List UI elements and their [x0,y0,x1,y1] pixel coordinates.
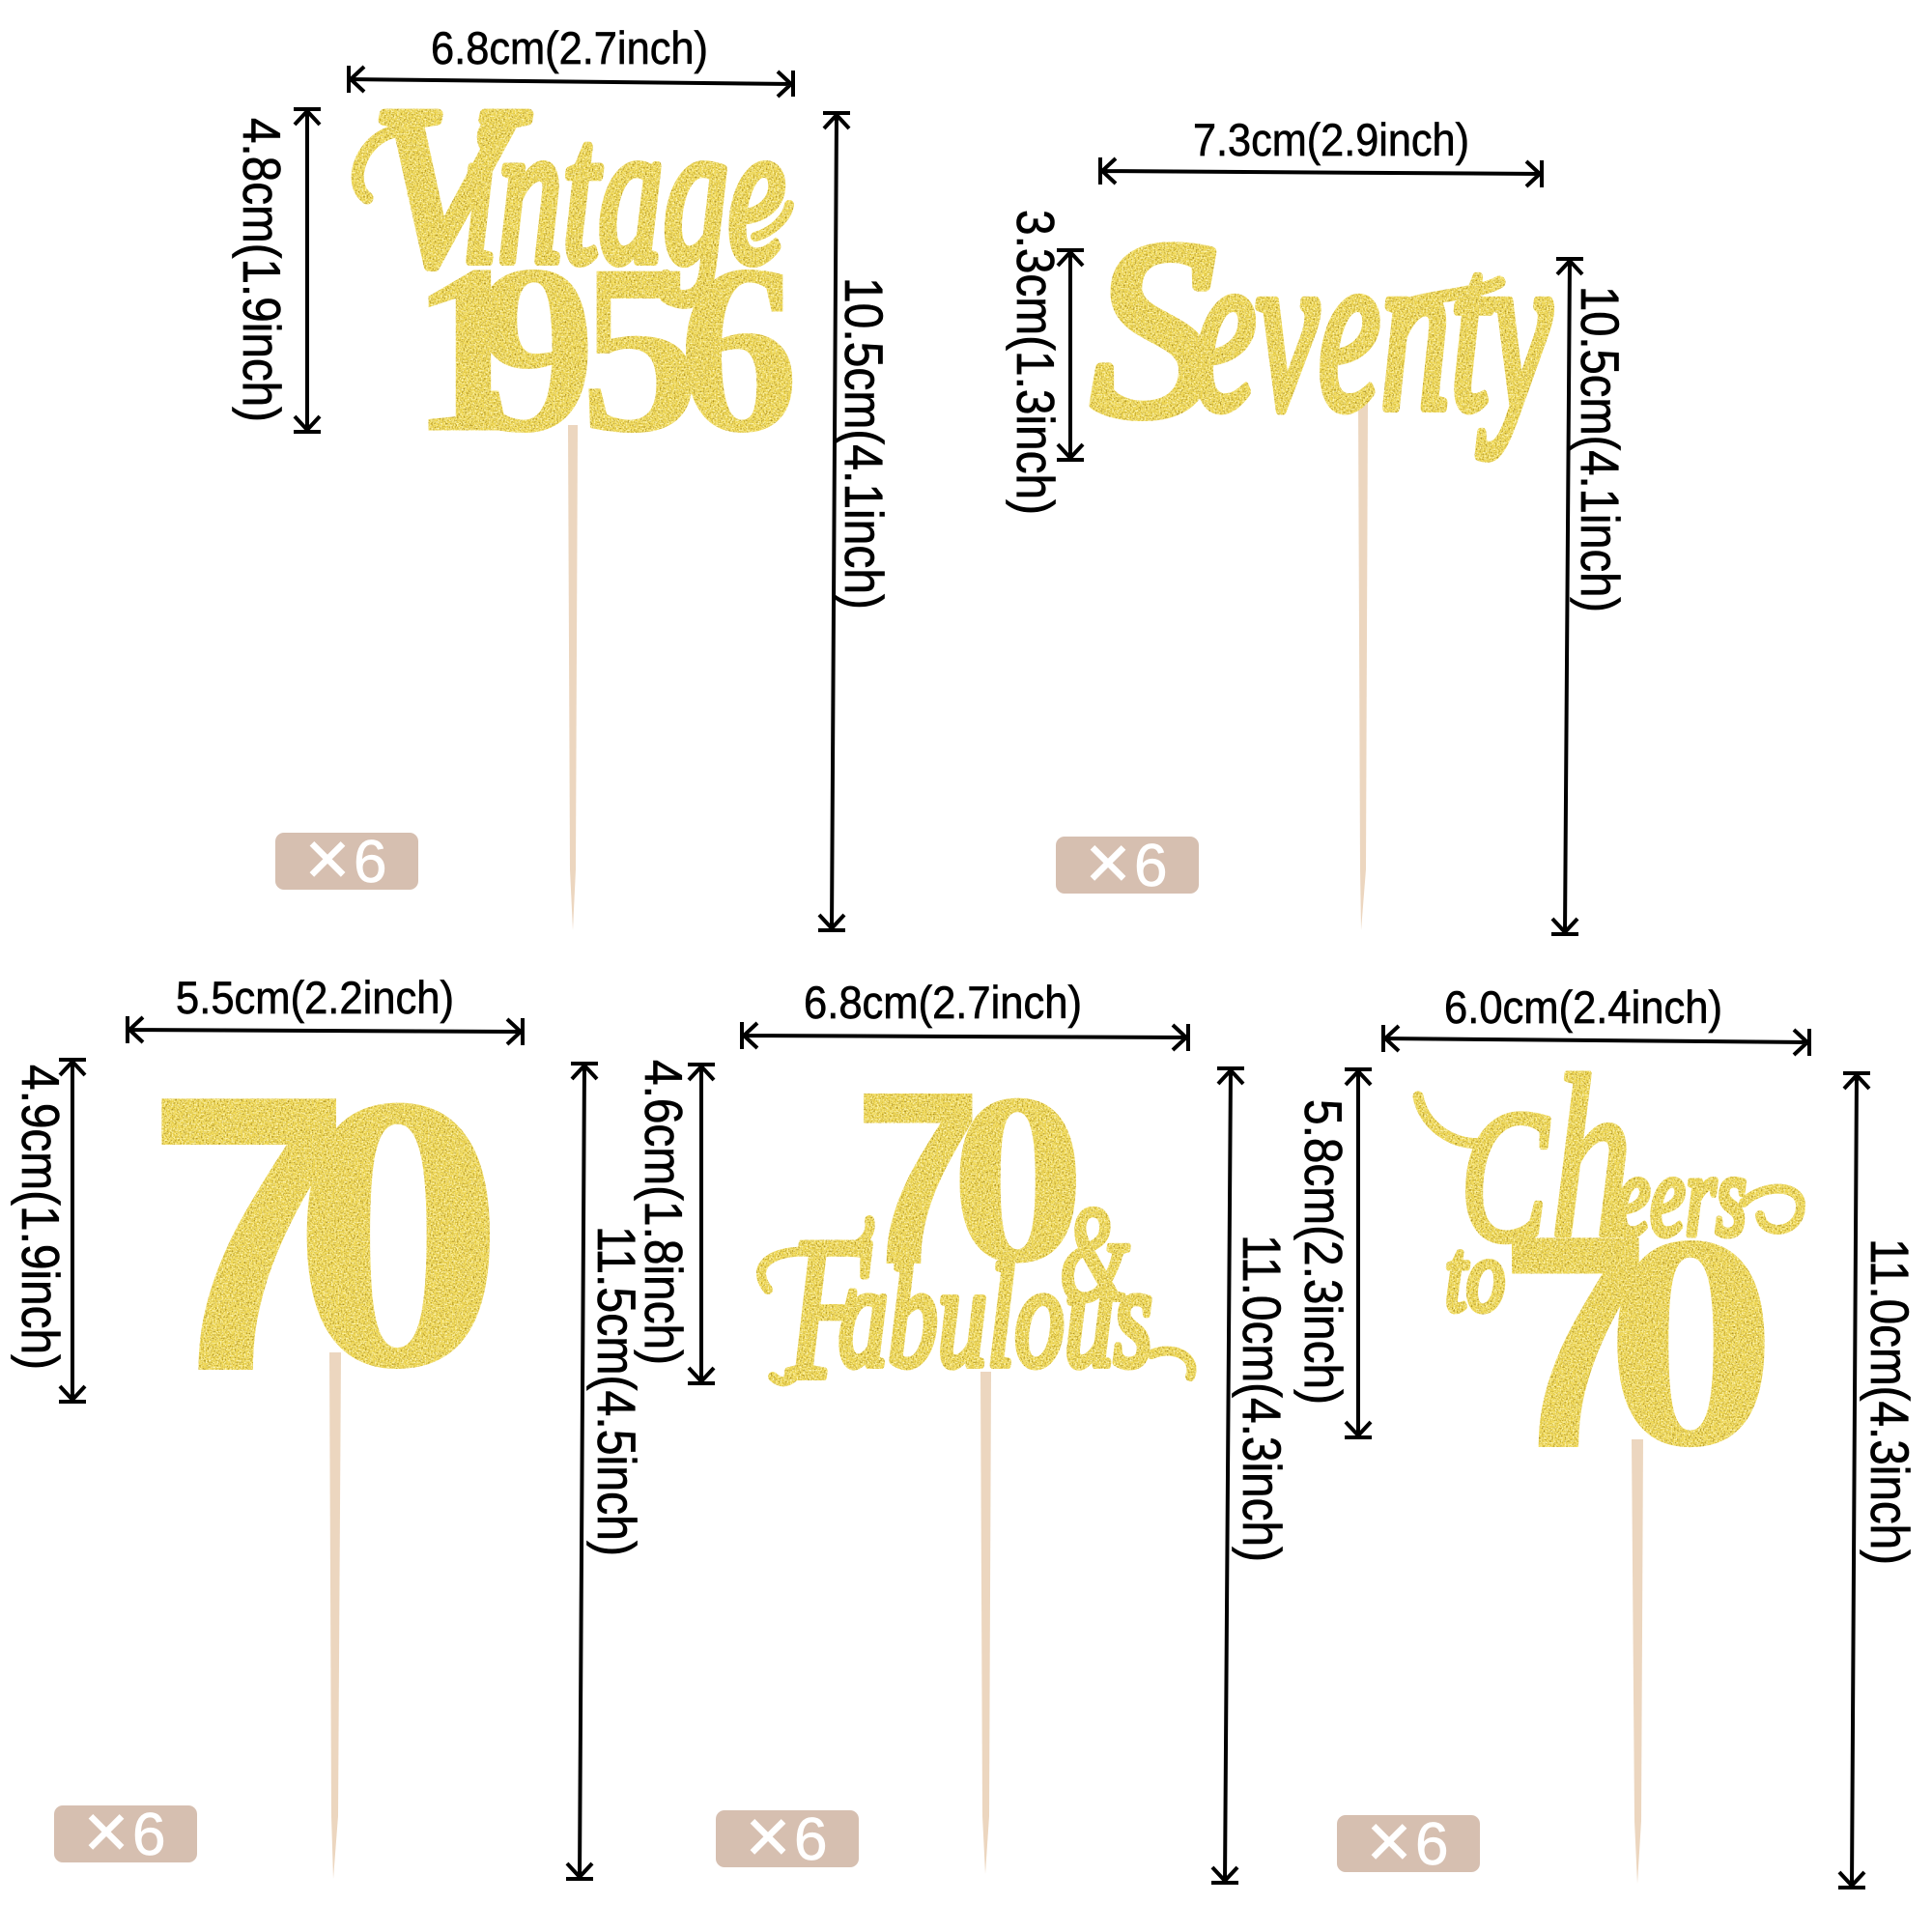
quantity badge: x6 [1056,819,1199,905]
total height label: 10.5cm: 10.5cm(4.1inch) [1570,286,1630,612]
topper: 70 glitter numerals: 0 [292,1016,505,1449]
topper: 70 and Fabulous glitter lettering: & [1060,1179,1129,1329]
quantity badge: x6 [275,815,418,901]
quantity badge: x6: 6 [132,1802,165,1868]
panel: Seventy topper [1006,114,1630,934]
quantity badge: x6 [716,1793,859,1879]
quantity badge: x6: 6 [354,829,386,895]
topper: Vintage 1956 glitter lettering: 1956 [410,215,799,483]
stick: Cheers to 70 [1632,1439,1643,1884]
total height arrow: 11.0cm [1838,1073,1870,1888]
total height label: 10.5cm: 10.5cm(4.1inch) [834,277,894,610]
topper: 70 and Fabulous glitter lettering: abulous [838,1236,1152,1397]
topper: Vintage 1956 glitter lettering: V [372,61,529,312]
total height arrow: 10.5cm [818,113,850,930]
topper: Cheers to 70 glitter lettering: 7 [1501,1175,1650,1511]
topper: Cheers to 70 glitter lettering: eers [1615,1131,1747,1260]
topper: 70 glitter numerals: 7 [147,1015,352,1453]
total height arrow: 11.0cm [1211,1068,1244,1883]
panel: 70 and Fabulous topper [634,977,1292,1883]
topper: Vintage 1956 glitter lettering: intage [462,81,785,305]
quantity badge: x6: 6 [794,1806,827,1873]
width dimension arrow: 6.8cm [349,66,793,97]
stick: Vintage 1956 [568,425,578,930]
height dimension arrow: 4.9cm [59,1060,86,1402]
topper: Cheers to 70 glitter lettering: to [1445,1219,1505,1332]
quantity badge: x6: × [84,1788,128,1874]
panel: Vintage 1956 topper [232,22,894,930]
height label: 3.3cm: 3.3cm(1.3inch) [1006,210,1065,515]
topper: Seventy glitter lettering [1092,190,1551,469]
height label: 4.6cm: 4.6cm(1.8inch) [634,1060,693,1365]
topper: Cheers to 70 glitter lettering [1418,1028,1801,1511]
topper: 70 and Fabulous glitter lettering: 0 [951,1045,1085,1313]
total height arrow: 11.5cm [566,1064,598,1879]
height dimension arrow: 4.8cm [294,109,321,432]
stick: 70 and Fabulous [980,1372,991,1874]
height label: 4.9cm: 4.9cm(1.9inch) [11,1065,70,1370]
topper: 70 and Fabulous glitter lettering [761,1041,1192,1421]
topper: Cheers to 70 glitter lettering: 0 [1605,1174,1776,1510]
topper: 70 and Fabulous glitter lettering: F [786,1197,871,1421]
height dimension arrow: 5.8cm [1345,1069,1372,1437]
height label: 5.8cm: 5.8cm(2.3inch) [1293,1099,1352,1405]
width dimension arrow: 7.3cm [1100,157,1542,187]
total height arrow: 10.5cm [1551,259,1583,934]
quantity badge: x6: 6 [1415,1811,1448,1878]
width label: 6.8cm: 6.8cm(2.7inch) [431,22,708,73]
width label: 7.3cm: 7.3cm(2.9inch) [1193,114,1469,165]
width label: 6.8cm: 6.8cm(2.7inch) [804,977,1082,1028]
total height label: 11.5cm: 11.5cm(4.5inch) [586,1226,646,1556]
quantity badge: x6: 6 [1134,833,1167,899]
width dimension arrow: 6.0cm [1383,1025,1809,1056]
stick: 70 [329,1352,341,1879]
quantity badge: x6 [1337,1798,1480,1884]
topper: Seventy glitter lettering: S [1092,190,1215,469]
total height label: 11.0cm: 11.0cm(4.3inch) [1860,1238,1919,1565]
stick: Seventy [1358,401,1368,930]
width label: 5.5cm: 5.5cm(2.2inch) [176,972,454,1023]
height dimension arrow: 3.3cm [1057,250,1084,460]
width label: 6.0cm: 6.0cm(2.4inch) [1444,981,1722,1033]
height label: 4.8cm: 4.8cm(1.9inch) [232,118,291,422]
quantity badge: x6: × [305,815,350,901]
quantity badge: x6: × [1086,819,1130,905]
quantity badge: x6 [54,1788,197,1874]
panel: 70 topper [11,972,646,1879]
total height label: 11.0cm: 11.0cm(4.3inch) [1232,1235,1292,1562]
width dimension arrow: 5.5cm [128,1016,523,1045]
topper: 70 and Fabulous glitter lettering: 7 [855,1041,981,1315]
width dimension arrow: 6.8cm [742,1022,1188,1051]
topper: Seventy glitter lettering: eventy [1194,201,1551,458]
topper: Vintage 1956 glitter lettering [357,61,799,483]
panel: Cheers to 70 topper [1293,981,1919,1888]
quantity badge: x6: × [746,1793,790,1879]
topper: 70 glitter numerals [147,1015,505,1453]
topper: Cheers to 70 glitter lettering: C [1461,1072,1548,1281]
quantity badge: x6: × [1367,1798,1411,1884]
height dimension arrow: 4.6cm [688,1065,715,1383]
topper: Cheers to 70 glitter lettering: h [1550,1028,1633,1285]
